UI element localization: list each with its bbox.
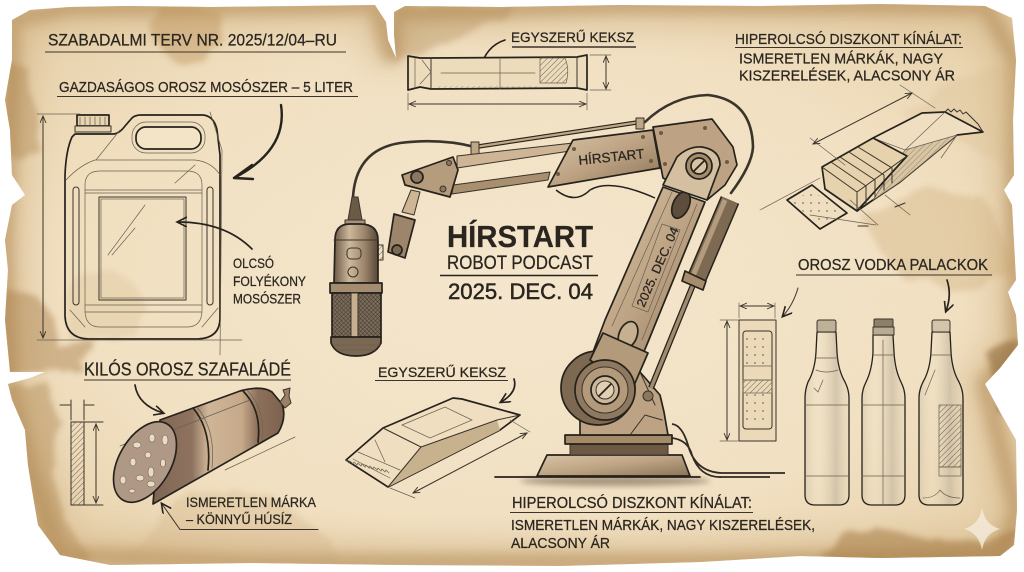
title block: 2025. DEC. 04 <box>448 279 593 304</box>
text: discount description bottom: ISMERETLEN MÁRKÁK, NAGY KISZERELÉSEK, <box>511 517 815 534</box>
arrow: to canister <box>234 105 282 179</box>
label: cheap liquid detergent: FOLYÉKONY <box>233 273 307 289</box>
base shadow <box>520 476 710 486</box>
heading: russian vodka bottles: OROSZ VODKA PALACKOK <box>798 257 989 274</box>
icon: opened biscuit pack <box>760 85 983 229</box>
icon: vertical biscuit pack <box>720 303 776 441</box>
text: discount description bottom: ALACSONY ÁR <box>511 535 610 552</box>
title block <box>440 219 598 304</box>
icon: flat biscuit pack <box>408 55 611 110</box>
text: discount description top <box>739 50 955 84</box>
sparkle mark <box>964 508 1000 550</box>
text: discount description top: KISZERELÉSEK, ALACSONY ÁR <box>739 68 955 84</box>
icon: vodka bottle 1 <box>805 320 849 505</box>
arrow: to liquid <box>178 222 252 249</box>
label: unknown brand, light meat flavour: – KÖNNYŰ HÚSÍZ <box>186 510 292 527</box>
cable: main overhead <box>353 95 753 197</box>
upper pipe <box>475 122 640 147</box>
heading: hyper-cheap discount top: HIPEROLCSÓ DISZKONT KÍNÁLAT: <box>735 31 962 48</box>
icon: robot arm <box>330 95 785 486</box>
main arm <box>590 187 705 385</box>
icon: salami <box>100 388 295 513</box>
label: cheap liquid detergent: OLCSÓ <box>233 255 274 271</box>
arrow: leader to salami <box>162 504 318 530</box>
pedestal <box>580 372 668 435</box>
text: discount description top: ISMERETLEN MÁRKÁK, NAGY <box>739 50 943 68</box>
arm label: HÍRSTART <box>578 146 645 168</box>
title block: ROBOT PODCAST <box>447 253 593 274</box>
heading: salami: KILÓS OROSZ SZAFALÁDÉ <box>84 358 291 380</box>
label: unknown brand, light meat flavour <box>186 494 317 527</box>
clamp <box>347 245 383 260</box>
arm date: 2025. DEC. 04 <box>634 225 682 309</box>
pivot lower <box>561 351 635 425</box>
heading: hyper-cheap discount bottom: HIPEROLCSÓ DISZKONT KÍNÁLAT: <box>512 495 752 512</box>
forearm <box>402 190 420 215</box>
heading: simple biscuit top: EGYSZERŰ KEKSZ <box>511 29 634 45</box>
arrow: to bottles <box>946 280 949 311</box>
text: discount description bottom <box>511 517 815 552</box>
piston <box>696 200 730 280</box>
icon: salami section drawing <box>60 400 103 505</box>
upper housing <box>653 119 737 200</box>
base plate <box>537 455 690 476</box>
base cables <box>672 424 785 477</box>
heading: simple biscuit bottom: EGYSZERŰ KEKSZ <box>378 364 506 380</box>
dimension: canister height <box>37 112 242 355</box>
label: cheap liquid detergent <box>233 255 307 306</box>
heading: patent plan: SZABADALMI TERV NR. 2025/12/04–RU <box>48 32 337 50</box>
icon: vodka bottle 2 <box>862 319 905 505</box>
arrow: to top pack <box>480 40 505 69</box>
pivot bracket <box>663 147 720 200</box>
upper plate <box>548 130 660 187</box>
piston rod <box>651 285 693 388</box>
microphone <box>348 197 362 220</box>
icon: pillow biscuit pack <box>346 398 530 498</box>
elbow <box>402 157 458 197</box>
title block: HÍRSTART <box>447 219 593 254</box>
icon: detergent canister <box>65 115 220 339</box>
icon: vodka bottle 3 <box>919 320 963 505</box>
label: cheap liquid detergent: MOSÓSZER <box>233 290 301 306</box>
arrow: to salami <box>135 385 163 413</box>
bars <box>457 143 573 168</box>
arrow: to vertical pack <box>783 288 798 316</box>
label: unknown brand, light meat flavour: ISMERETLEN MÁRKA <box>186 494 317 510</box>
heading: detergent: GAZDASÁGOS OROSZ MOSÓSZER – 5 LITER <box>59 79 353 96</box>
arrow: to bottom pack <box>501 379 515 402</box>
